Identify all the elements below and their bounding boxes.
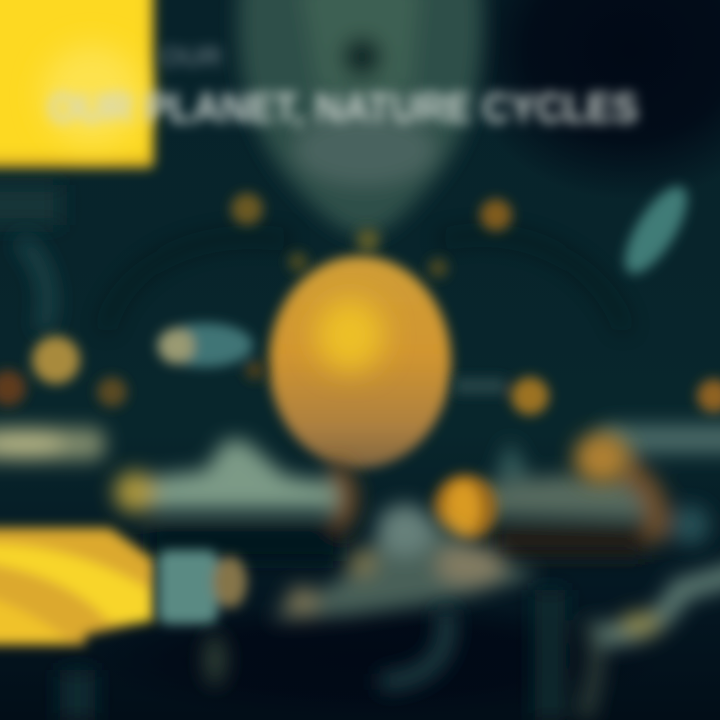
lower center ridge bbox=[270, 504, 540, 620]
amber orb bbox=[433, 474, 497, 542]
lower shading bbox=[80, 600, 660, 720]
dark hook bbox=[60, 610, 446, 720]
middle-left platform bbox=[114, 440, 347, 561]
icon: left teal stem bbox=[20, 240, 48, 330]
connecting arcs bbox=[105, 235, 625, 330]
yellow lower-left panel bbox=[0, 528, 154, 645]
title: OUR bbox=[160, 41, 222, 72]
lower right squiggle bbox=[535, 570, 720, 720]
left band bbox=[0, 428, 105, 460]
icon: teal leaf bbox=[613, 178, 699, 282]
egg highlight bbox=[316, 299, 384, 371]
left orb and teal eye bbox=[0, 323, 265, 407]
globe graphic bbox=[0, 0, 483, 235]
yellow title box bbox=[0, 0, 154, 168]
right platform bbox=[480, 425, 720, 557]
right orange blob bbox=[574, 432, 630, 484]
dark corner shading bbox=[460, 0, 720, 200]
title: OUR PLANET, NATURE CYCLES bbox=[48, 84, 638, 131]
teal lower-left tab bbox=[158, 550, 247, 624]
central golden egg bbox=[269, 256, 451, 468]
right orbs bbox=[455, 377, 720, 415]
yellow box glow bbox=[42, 45, 142, 145]
node dots on arcs bbox=[231, 193, 512, 278]
title bbox=[48, 41, 638, 131]
